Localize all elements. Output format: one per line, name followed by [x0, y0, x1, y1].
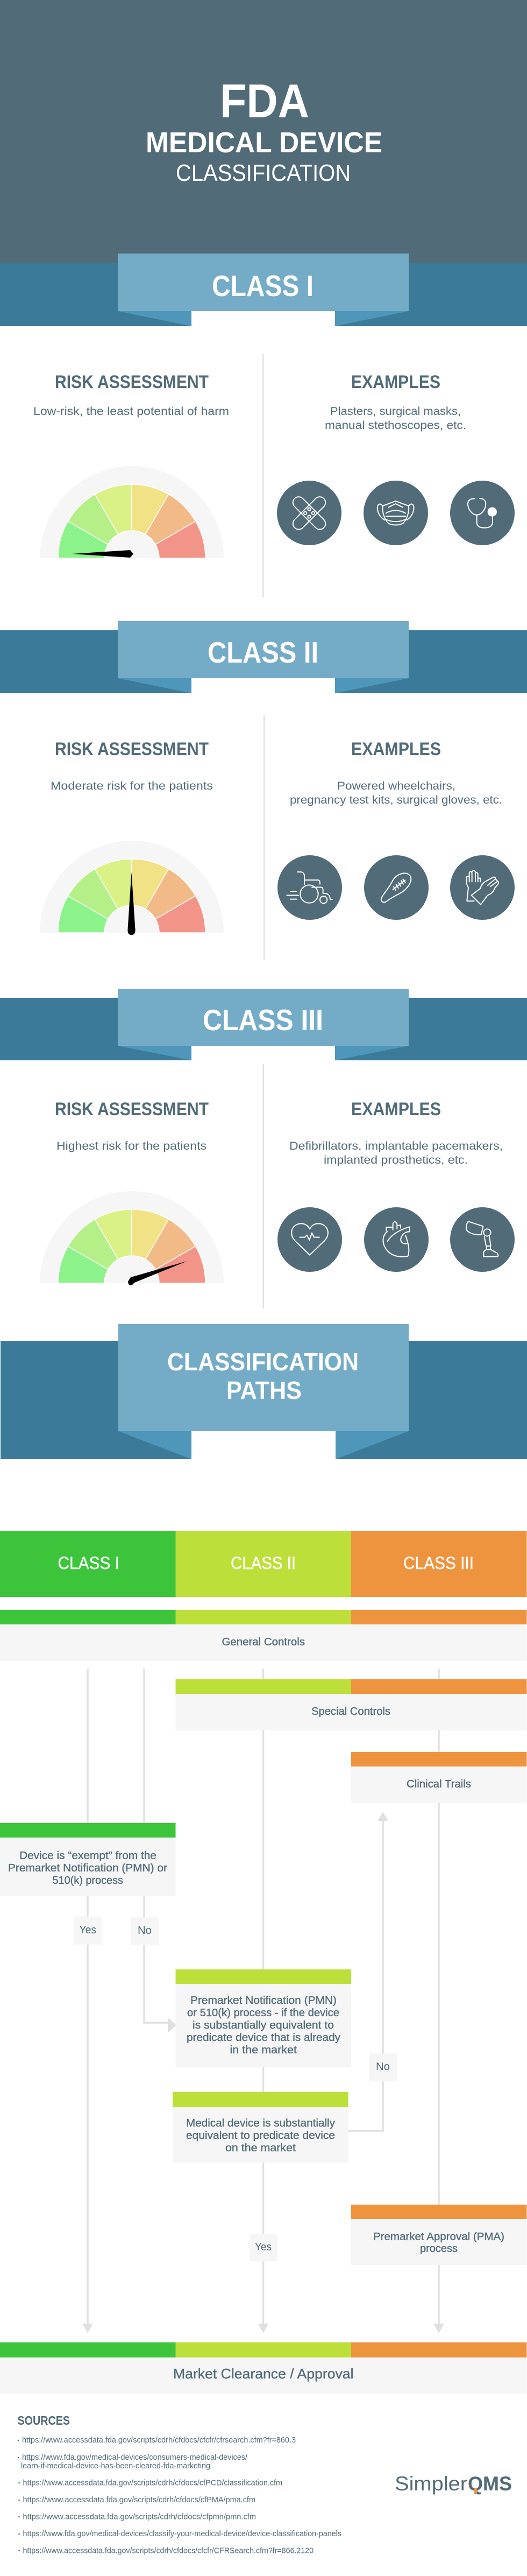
arrow: to clinical trials [378, 1812, 388, 1821]
text: sources list: https://www.accessdata.fda.gov/scripts/cdrh/cfdocs/cfPMA/pma.cfm [23, 2495, 255, 2504]
heading: sources: SOURCES [17, 2413, 70, 2427]
ribbon: classification paths: PATHS [226, 1376, 302, 1404]
box: exempt device: 510(k) process [53, 1875, 123, 1887]
ribbon: classification paths [1, 1324, 527, 1460]
text: sources list: https://www.fda.gov/medical-devices/classify-your-medical-device/device-classification-panels [23, 2529, 341, 2538]
ribbon: class III: CLASS III [203, 1003, 323, 1037]
gauge: moderate risk [40, 841, 224, 935]
arrow: to market clearance class I [82, 2324, 93, 2333]
ribbon: classification paths: CLASSIFICATION [167, 1348, 359, 1376]
heading: examples: EXAMPLES [351, 372, 440, 392]
text: sources list: https://www.accessdata.fda.gov/scripts/cdrh/cfdocs/cfcfr/CFRSearch.cfm?fr=866.2120 [23, 2546, 314, 2556]
gauge: low risk [40, 466, 224, 558]
box: substantially equivalent: equivalent to predicate device [186, 2130, 335, 2142]
text: examples list [325, 405, 466, 432]
box: exempt device: Premarket Notification (PMN) or [8, 1862, 167, 1874]
box: substantially equivalent: on the market [225, 2142, 296, 2154]
text: risk description: Low-risk, the least potential of harm [33, 405, 229, 418]
heading: risk assessment: RISK ASSESSMENT [55, 1099, 209, 1120]
ribbon: class II: CLASS II [208, 636, 318, 669]
label: no: No [138, 1925, 152, 1937]
text: sources list: https://www.accessdata.fda.gov/scripts/cdrh/cfdocs/cfPCD/classification.cfm [23, 2478, 282, 2488]
arrow: to premarket notification [168, 2017, 176, 2033]
box: premarket approval [351, 2205, 527, 2265]
text: risk description: Highest risk for the patients [56, 1139, 206, 1152]
text: examples list [290, 779, 502, 806]
box: exempt device [0, 1823, 175, 1896]
ribbon: class I: CLASS I [212, 269, 314, 302]
icon: pregnancy test [364, 855, 429, 920]
label: yes (to market clearance): Yes [255, 2241, 272, 2253]
box: clinical trails [351, 1752, 527, 1803]
label: yes (to market clearance) [250, 2234, 277, 2262]
label: yes [74, 1916, 102, 1945]
panel: class I risk and examples [33, 354, 515, 597]
box: clinical trails: Clinical Trails [407, 1778, 471, 1790]
text: sources list: https://www.accessdata.fda.gov/scripts/cdrh/cfdocs/cfcfr/cfrsearch.cfm?fr=860.3 [22, 2436, 296, 2445]
needle [72, 550, 133, 558]
label: no (to clinical trails): No [376, 2061, 390, 2073]
icon: surgical gloves [450, 855, 515, 920]
box: general controls: General Controls [222, 1636, 305, 1648]
text: examples list: Plasters, surgical masks, [330, 405, 461, 418]
header panel [0, 0, 527, 263]
text: examples list: pregnancy test kits, surgical gloves, etc. [290, 793, 502, 806]
text: examples list [289, 1139, 503, 1166]
box: general controls [0, 1610, 527, 1661]
ribbon: class I [0, 254, 527, 327]
box: premarket approval: Premarket Approval (PMA) [373, 2231, 504, 2243]
title: FDA [220, 74, 309, 128]
class header columns: CLASS I [58, 1553, 119, 1573]
text: sources list: https://www.fda.gov/medical-devices/consumers-medical-devices/ [22, 2453, 248, 2462]
heading: examples: EXAMPLES [351, 739, 441, 759]
arrow: to market clearance class III [433, 2324, 444, 2333]
label: no (to clinical trails) [369, 2053, 397, 2081]
box: exempt device: Device is “exempt” from the [19, 1850, 156, 1862]
icon: plaster [277, 481, 341, 545]
icon: anatomical heart [364, 1207, 429, 1272]
heading: examples: EXAMPLES [351, 1099, 441, 1120]
icon: surgical mask [364, 481, 428, 545]
panel: class II risk and examples [40, 715, 515, 960]
text: sources list: learn-if-medical-device-has-been-cleared-fda-marketing [21, 2461, 210, 2471]
title [146, 74, 382, 186]
box: special controls: Special Controls [311, 1706, 390, 1718]
ribbon: class II [0, 621, 527, 694]
icon: heart with pulse [277, 1207, 342, 1272]
text: sources list: https://www.accessdata.fda.gov/scripts/cdrh/cfdocs/cfpmn/pmn.cfm [23, 2512, 256, 2521]
icon: stethoscope [450, 481, 515, 545]
box: special controls [175, 1679, 527, 1730]
label: yes: Yes [80, 1924, 96, 1936]
box: premarket notification: Premarket Notification (PMN) [190, 1995, 337, 2007]
box: market clearance [0, 2342, 527, 2394]
text: sources list [18, 2436, 341, 2556]
heading: risk assessment: RISK ASSESSMENT [55, 372, 209, 392]
box: premarket notification: in the market [230, 2044, 297, 2056]
text: examples list: Defibrillators, implantable pacemakers, [289, 1139, 503, 1152]
box: substantially equivalent: Medical device is substantially [186, 2117, 335, 2129]
text: examples list: manual stethoscopes, etc. [325, 419, 466, 432]
needle [128, 1261, 187, 1285]
class header columns: CLASS II [231, 1553, 296, 1573]
text: examples list: implanted prosthetics, etc. [324, 1153, 468, 1166]
box: premarket notification: or 510(k) process - if the device [187, 2007, 339, 2019]
arrow: to market clearance class II [258, 2324, 269, 2333]
title: CLASSIFICATION [176, 160, 351, 186]
text: examples list: Powered wheelchairs, [337, 779, 455, 792]
needle [127, 872, 136, 935]
panel: class III risk and examples [40, 1064, 515, 1308]
box: premarket notification [175, 1969, 351, 2067]
heading: risk assessment: RISK ASSESSMENT [55, 739, 209, 759]
box: premarket notification: predicate device that is already [187, 2032, 340, 2044]
logo: SimplerQMS [395, 2473, 512, 2495]
gauge: highest risk [40, 1191, 224, 1285]
logo: SimplerQMS: Simpler [395, 2473, 467, 2495]
box: market clearance: Market Clearance / Approval [173, 2366, 354, 2382]
class header columns [0, 1531, 527, 1597]
icon: prosthetic leg [450, 1207, 515, 1272]
class header columns: CLASS III [403, 1553, 474, 1573]
logo: SimplerQMS: QMS [468, 2473, 512, 2495]
box: premarket approval: process [420, 2243, 458, 2255]
icon: wheelchair [277, 855, 342, 920]
box: premarket notification: is substantially equivalent to [193, 2019, 334, 2031]
label: no [131, 1917, 159, 1945]
title: MEDICAL DEVICE [146, 126, 382, 159]
box: substantially equivalent [173, 2092, 348, 2163]
text: risk description: Moderate risk for the patients [51, 779, 213, 792]
ribbon: class III [0, 989, 527, 1061]
flow connectors [82, 1669, 444, 2333]
